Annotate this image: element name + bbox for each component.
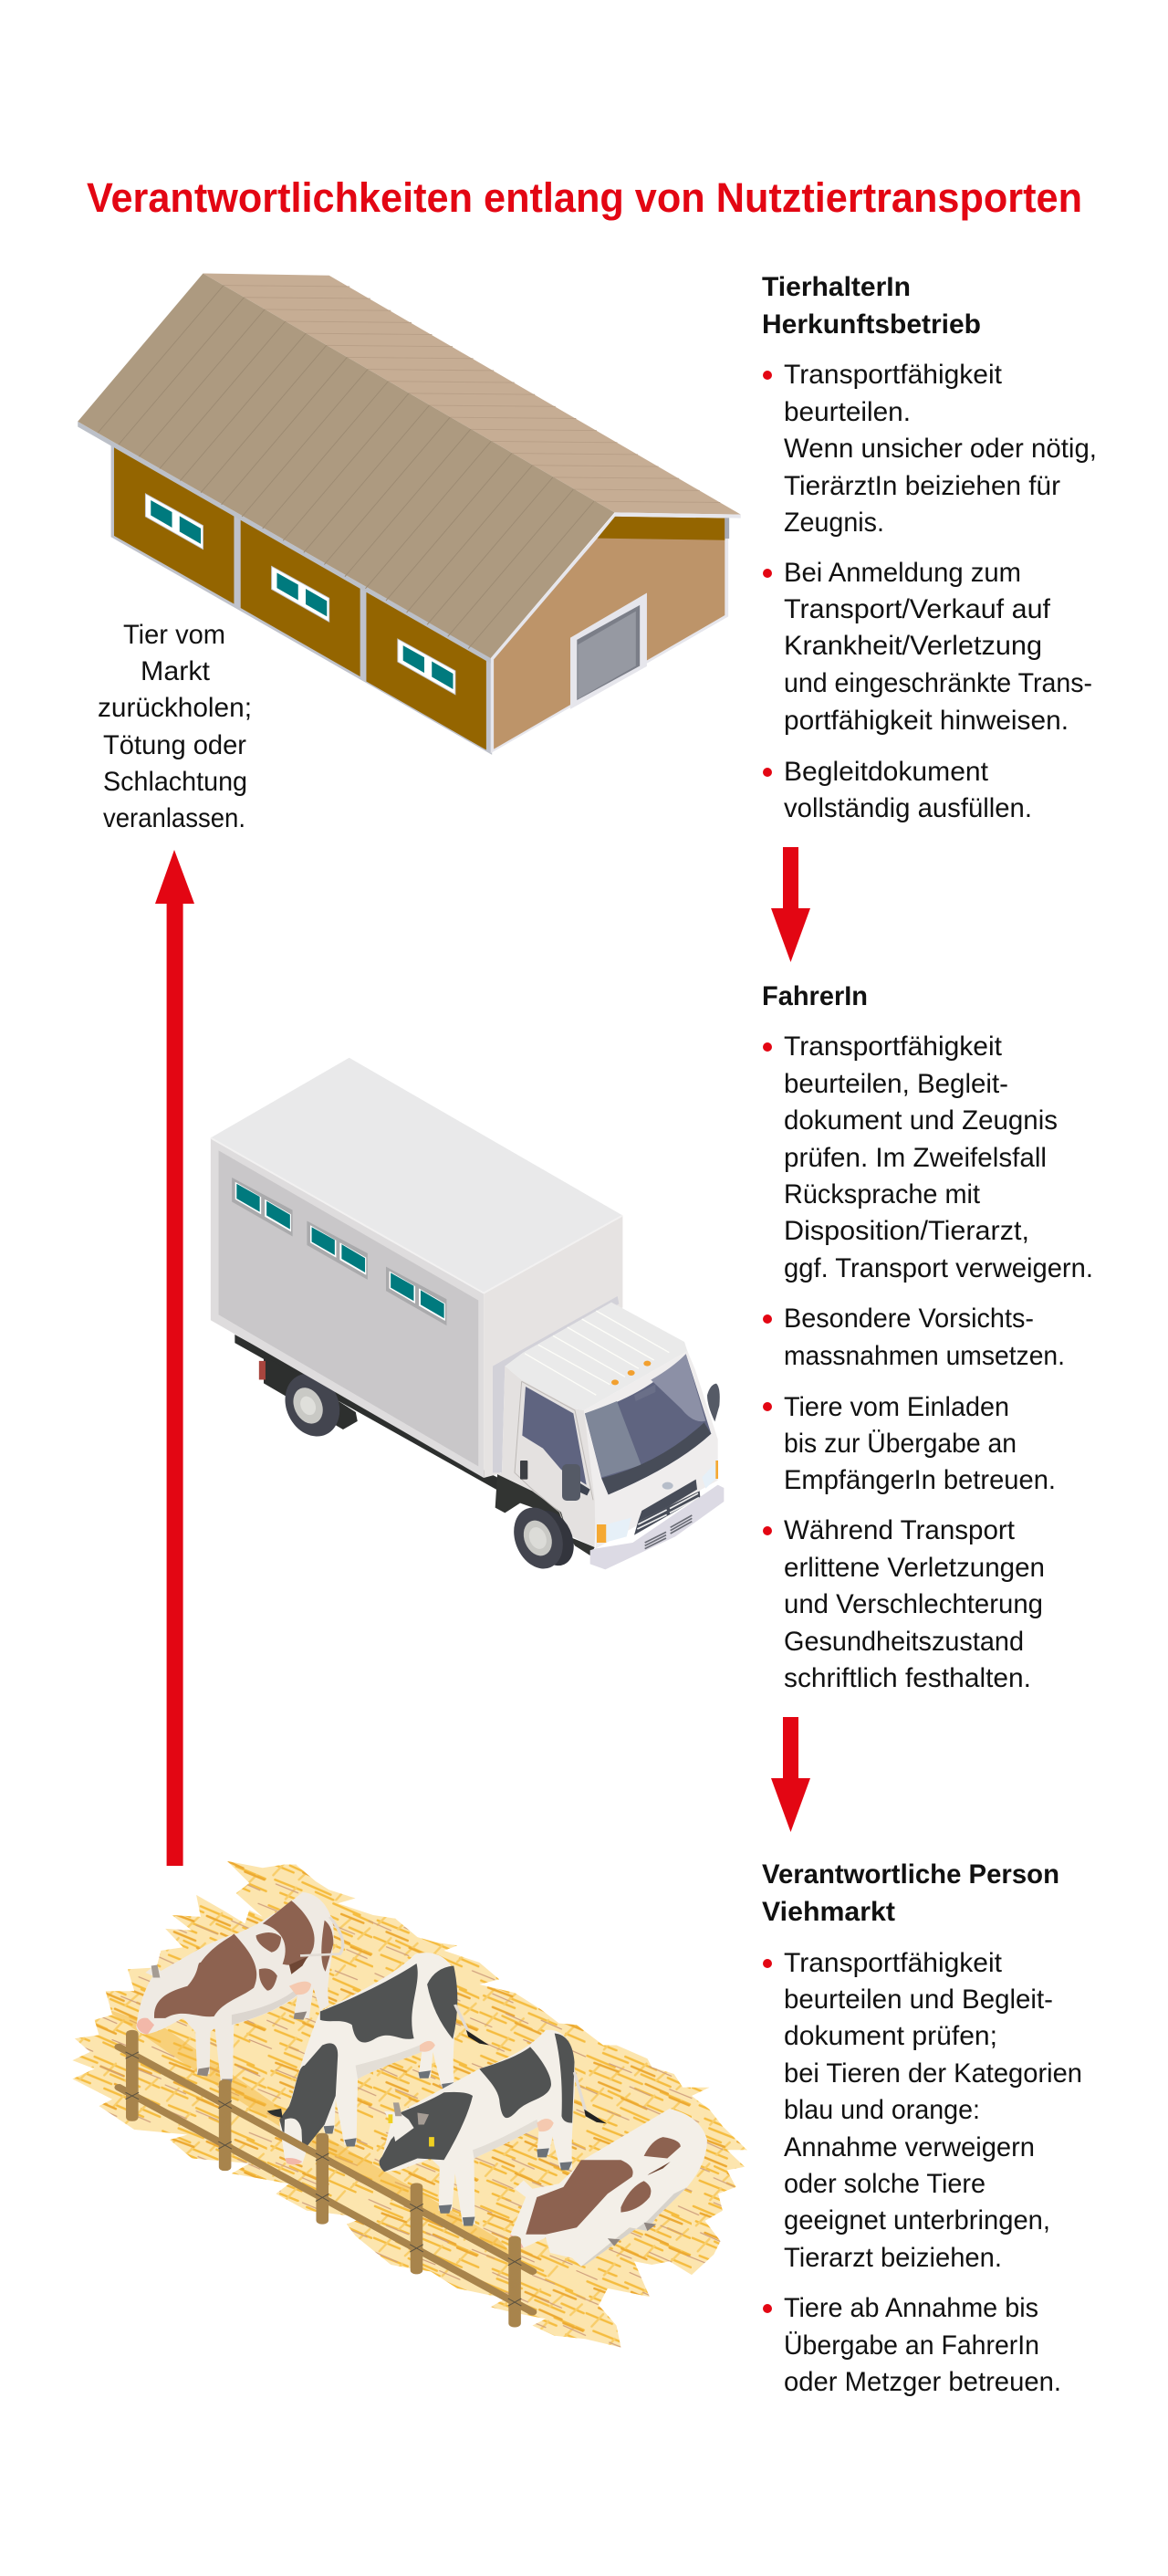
bullet list: TierhalterIn: beurteilen. [784,397,911,427]
bumper [590,1485,724,1569]
bullet list: TierhalterIn: Bei Anmeldung zum [784,558,1021,588]
cow: black and white centre [267,1953,489,2164]
arrow: down to FahrerIn [771,847,810,962]
roof left face [78,273,615,658]
roof eave [78,422,491,664]
brown wall panels [114,446,486,750]
cargo box top [211,1058,622,1293]
bullet list: Viehmarkt: oder Metzger betreuen. [784,2367,1061,2397]
roof right face [203,273,741,515]
bullet list: FahrerIn: Tiere vom Einladen [784,1392,1009,1422]
cab chassis [495,1474,595,1555]
barn door [570,592,647,709]
bullet list: FahrerIn: Während Transport [784,1515,1016,1545]
text: return from market: Tier vom [123,620,225,650]
bullet list: FahrerIn: EmpfängerIn betreuen. [784,1465,1056,1495]
rear wheel [276,1365,349,1445]
cargo box front [484,1216,622,1478]
windshield [585,1354,711,1494]
bullet list: Viehmarkt: Übergabe an FahrerIn [784,2330,1039,2361]
door window [522,1387,587,1485]
gable wall [491,513,728,753]
bullet list: FahrerIn [763,1031,1093,1693]
bullet list: TierhalterIn: Begleitdokument [784,757,989,787]
cab roof [505,1303,687,1410]
bullet list: Viehmarkt: Transportfähigkeit [784,1948,1003,1978]
bullet list: TierhalterIn: TierärztIn beiziehen für [784,471,1060,501]
arrow: down to Viehmarkt [771,1717,810,1832]
bullet list: TierhalterIn: vollständig ausfüllen. [784,793,1032,823]
panel: TierhalterIn Herkunftsbetrieb [762,272,1097,823]
heading: Verantwortliche Person Viehmarkt [762,1859,1059,1927]
bullet list: TierhalterIn: Zeugnis. [784,508,884,538]
chassis [235,1335,500,1492]
cab side [497,1367,596,1547]
bullet list: TierhalterIn: Transportfähigkeit [784,360,1003,390]
heading: FahrerIn: FahrerIn [762,981,868,1011]
heading: Verantwortliche Person Viehmarkt: Viehmarkt [762,1897,895,1927]
illustration: cows on straw behind fence [55,1853,763,2360]
truck cab [493,1296,724,1576]
bullet list: FahrerIn: ggf. Transport verweigern. [784,1253,1093,1283]
bullet list: Viehmarkt: Annahme verweigern [784,2132,1035,2162]
illustration: livestock truck [211,1058,724,1576]
text: return from market: Markt [141,656,211,686]
front wheel [506,1500,582,1576]
text: return from market: veranlassen. [103,803,245,833]
bullet list: Viehmarkt: beurteilen und Begleit- [784,1984,1053,2015]
bullet list: Viehmarkt: bei Tieren der Kategorien [784,2058,1082,2089]
text: return from market: Tötung oder [103,730,246,760]
bullet list: FahrerIn: Disposition/Tierarzt, [784,1216,1029,1246]
bullet list: FahrerIn: Transportfähigkeit [784,1031,1003,1062]
bullet list: FahrerIn: Gesundheitszustand [784,1627,1024,1657]
arrow: upward return [155,850,194,1866]
fence [119,2030,532,2327]
bullet list: FahrerIn: dokument und Zeugnis [784,1105,1058,1136]
bullet list: FahrerIn: bis zur Übergabe an [784,1429,1017,1459]
grille [634,1480,700,1535]
panel: Verantwortliche Person Viehmarkt [762,1859,1082,2397]
bullet list: FahrerIn: massnahmen umsetzen. [784,1341,1065,1371]
bullet list: FahrerIn: prüfen. Im Zweifelsfall [784,1143,1047,1173]
text: return from market: Schlachtung [103,767,247,797]
truck body [211,1058,622,1492]
cab gap [493,1296,619,1472]
text: return from market: zurückholen; [98,693,252,723]
bullet list: Viehmarkt: dokument prüfen; [784,2021,997,2051]
cargo box side [211,1138,484,1478]
title: Verantwortlichkeiten entlang von Nutztiertransporten [87,174,1082,221]
heading: TierhalterIn: Herkunftsbetrieb [762,309,981,340]
bullet list: FahrerIn: Rücksprache mit [784,1179,981,1209]
bullet list: FahrerIn: und Verschlechterung [784,1589,1043,1619]
heading: TierhalterIn: TierhalterIn [762,272,911,302]
truck windows [232,1178,446,1325]
heading: TierhalterIn [762,272,981,340]
bullet list: FahrerIn: schriftlich festhalten. [784,1663,1031,1693]
bullet list: TierhalterIn: Wenn unsicher oder nötig, [784,434,1097,464]
bullet list: Viehmarkt: Tiere ab Annahme bis [784,2293,1038,2323]
cow: black and white front [380,2030,607,2225]
panel: FahrerIn [762,981,1093,1693]
bullet list: TierhalterIn: und eingeschränkte Trans- [784,668,1092,698]
heading: Verantwortliche Person Viehmarkt: Verantwortliche Person [762,1859,1059,1890]
cab front [584,1351,718,1549]
bullet list: Viehmarkt: Tierarzt beiziehen. [784,2243,1002,2273]
cow: brown lying front [510,2109,707,2267]
bullet list: Viehmarkt: blau und orange: [784,2095,980,2125]
bullet list: FahrerIn: Besondere Vorsichts- [784,1304,1034,1334]
straw bedding [55,1853,763,2360]
bullet list: FahrerIn: erlittene Verletzungen [784,1553,1045,1583]
text: return from market [98,620,252,833]
headlights [597,1461,718,1543]
windows [145,494,455,695]
bullet list: Viehmarkt: geeignet unterbringen, [784,2205,1050,2236]
cow: brown back left [136,1892,343,2085]
bullet list: TierhalterIn: Transport/Verkauf auf [784,594,1051,624]
bullet list: TierhalterIn: portfähigkeit hinweisen. [784,706,1069,736]
mirrors [562,1384,720,1501]
bullet list: TierhalterIn: Krankheit/Verletzung [784,631,1042,661]
illustration: farm building [78,273,741,755]
bullet list: FahrerIn: beurteilen, Begleit- [784,1069,1008,1099]
bullet list: Viehmarkt [763,1948,1082,2397]
bullet list: Viehmarkt: oder solche Tiere [784,2169,986,2199]
wall frame [111,443,492,755]
bullet list: TierhalterIn [763,360,1097,823]
